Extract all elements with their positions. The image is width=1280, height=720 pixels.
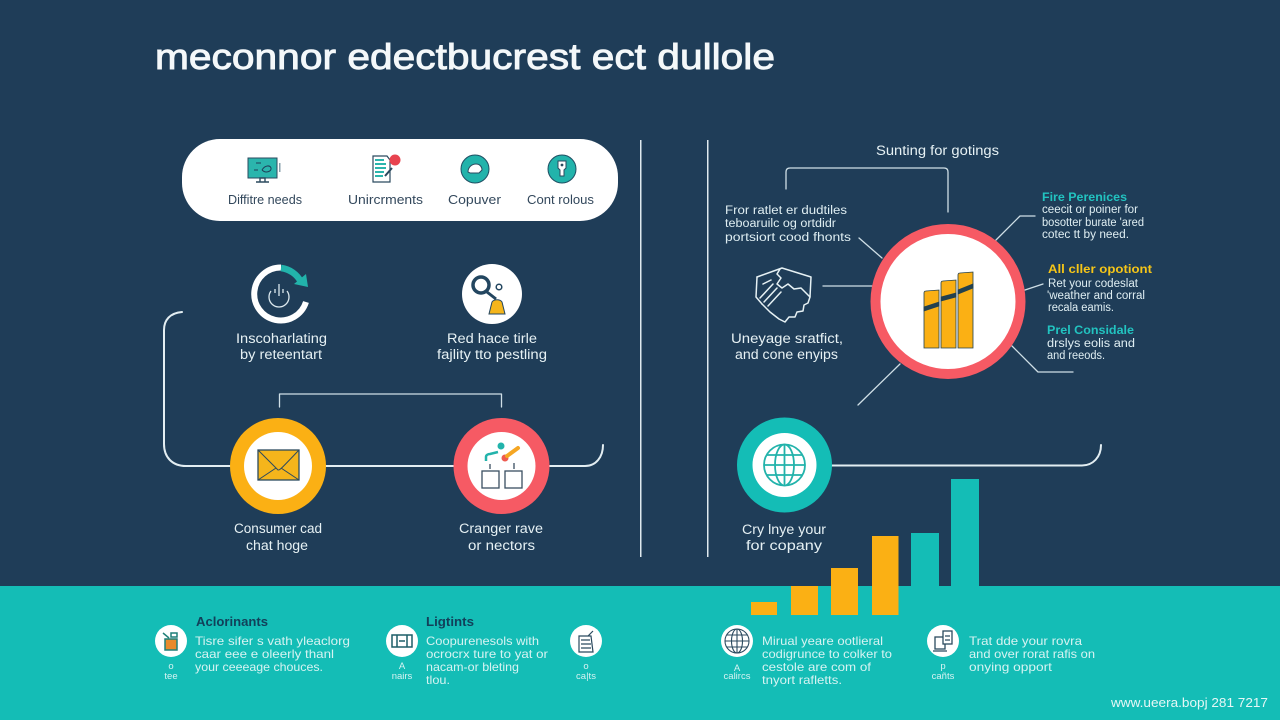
divider: right vertical — [707, 140, 708, 557]
footer item: global: calircs — [724, 671, 751, 682]
icon: yellow columns — [924, 272, 973, 348]
footer item: achievements — [155, 615, 350, 682]
text: handshake caption: and cone enyips — [735, 347, 838, 362]
bottom teal band — [0, 586, 1280, 720]
icon: clipboard — [570, 625, 602, 657]
text: consumer: Consumer cad — [234, 521, 322, 536]
footer item: insights: Coopurenesols with — [426, 634, 539, 648]
text: step two: fajlity tto pestling — [437, 347, 547, 362]
callout: options: 'weather and corral — [1047, 290, 1145, 302]
text: changer — [459, 521, 543, 553]
footer item: insights: nacam-or bleting — [426, 660, 519, 674]
text: step two — [437, 331, 547, 362]
icon: monitor — [248, 158, 280, 182]
text: changer: Cranger rave — [459, 521, 543, 536]
node: envelope circle — [230, 418, 326, 514]
footer item: insights — [386, 615, 548, 687]
callout: options — [1047, 262, 1152, 314]
footer item: clipboard: ca|ts — [576, 671, 596, 682]
footer item: trade — [927, 625, 1095, 682]
footer item: global: tnyort rafletts. — [762, 673, 842, 687]
footer item: clipboard: o — [583, 661, 589, 672]
label: requirements: Unircrments — [348, 193, 423, 207]
footer item: trade: p — [940, 661, 946, 672]
text: intro block: teboaruilc og ortdidr — [725, 218, 836, 230]
text: step one: Inscoharlating — [236, 331, 327, 346]
callout: options: recala eamis. — [1048, 302, 1114, 314]
text: step one — [236, 331, 327, 362]
icon: box — [155, 625, 187, 657]
text: handshake caption: Uneyage sratfict, — [731, 331, 843, 346]
callout: considerations — [1047, 323, 1135, 362]
callout: preferences: bosotter burate 'ared — [1042, 217, 1144, 229]
icon: document with pin — [373, 154, 400, 182]
footer item: achievements: o — [168, 661, 174, 672]
footer item: global: A — [734, 663, 741, 674]
text: step two: Red hace tirle — [447, 331, 537, 346]
callout: considerations: and reeods. — [1047, 350, 1105, 362]
bar chart — [751, 479, 979, 615]
text: consumer — [234, 521, 322, 553]
node: globe circle — [737, 418, 832, 512]
footer item: insights: ocrocrx ture to yat or — [426, 647, 548, 661]
icon: handshake — [756, 268, 811, 322]
text: consumer: chat hoge — [246, 538, 308, 553]
connector: right bracket — [786, 168, 948, 212]
hub: central chart circle — [876, 229, 1020, 374]
text: company: for copany — [746, 538, 822, 553]
icon: map card — [386, 625, 418, 657]
text: handshake caption — [731, 331, 843, 362]
title: meconnor edectbucrest ect dullole — [155, 36, 775, 77]
label: computer: Copuver — [448, 193, 501, 207]
callout: preferences — [1042, 190, 1144, 241]
footer item: achievements: your ceeeage chouces. — [195, 660, 323, 674]
footer item: global: cestole are com of — [762, 660, 872, 674]
divider: left vertical — [640, 140, 642, 557]
footer item: achievements: Aclorinants — [196, 615, 268, 629]
text: company — [742, 522, 827, 553]
footer item: achievements: Tisre sifer s vath yleaclorg — [195, 634, 350, 648]
text: company: Cry lnye your — [742, 522, 827, 537]
text: step one: by reteentart — [240, 347, 322, 362]
footer item: insights: Ligtints — [426, 615, 474, 629]
footer item: insights: nairs — [392, 671, 413, 682]
icon: magnifier and bag — [462, 264, 522, 324]
label: controls: Cont rolous — [527, 193, 594, 207]
heading: right section: Sunting for gotings — [876, 143, 999, 158]
callout: considerations: drslys eolis and — [1047, 338, 1135, 350]
callout: options: All cller opotiont — [1048, 262, 1152, 276]
leader lines — [823, 216, 1073, 405]
icon: teal round mouse — [461, 155, 489, 183]
text: intro block — [725, 205, 851, 244]
footer url: www.ueera.bopj 281 7217 — [1110, 696, 1268, 710]
callout: preferences: cotec tt by need. — [1042, 229, 1129, 241]
callout: preferences: ceecit or poiner for — [1042, 204, 1138, 216]
footer item: achievements: tee — [164, 671, 178, 682]
footer item: global: Mirual yeare ootlieral — [762, 634, 883, 648]
footer item: insights: tlou. — [426, 673, 450, 687]
icon: small globe — [721, 625, 753, 657]
icon: teal round key — [548, 155, 576, 183]
connector: globe line — [831, 445, 1101, 466]
callout: options: Ret your codeslat — [1048, 278, 1139, 290]
node: connector circle — [454, 418, 550, 514]
footer item: clipboard — [570, 625, 602, 682]
text: intro block: portsiort cood fhonts — [725, 232, 851, 244]
connector: left loop line — [164, 312, 603, 466]
footer item: achievements: caar eee e oleerly thanl — [195, 647, 334, 661]
text: changer: or nectors — [468, 538, 535, 553]
connector: bracket between circles — [280, 394, 502, 407]
footer item: global: codigrunce to colker to — [762, 647, 892, 661]
icon: devices — [927, 625, 959, 657]
footer item: global — [721, 625, 892, 687]
footer item: trade: Trat dde your rovra — [969, 634, 1082, 648]
label: needs: Diffitre needs — [228, 193, 302, 207]
footer item: trade: cañts — [932, 671, 955, 682]
callout: considerations: Prel Considale — [1047, 323, 1134, 337]
footer item: trade: and over rorat rafis on — [969, 647, 1095, 661]
callout: preferences: Fire Perenices — [1042, 190, 1127, 204]
panel: white icon strip — [182, 139, 618, 221]
footer item: insights: A — [399, 661, 406, 672]
text: intro block: Fror ratlet er dudtiles — [725, 205, 847, 217]
footer item: trade: onying opport — [969, 660, 1053, 674]
icon: refresh ring — [254, 267, 308, 320]
